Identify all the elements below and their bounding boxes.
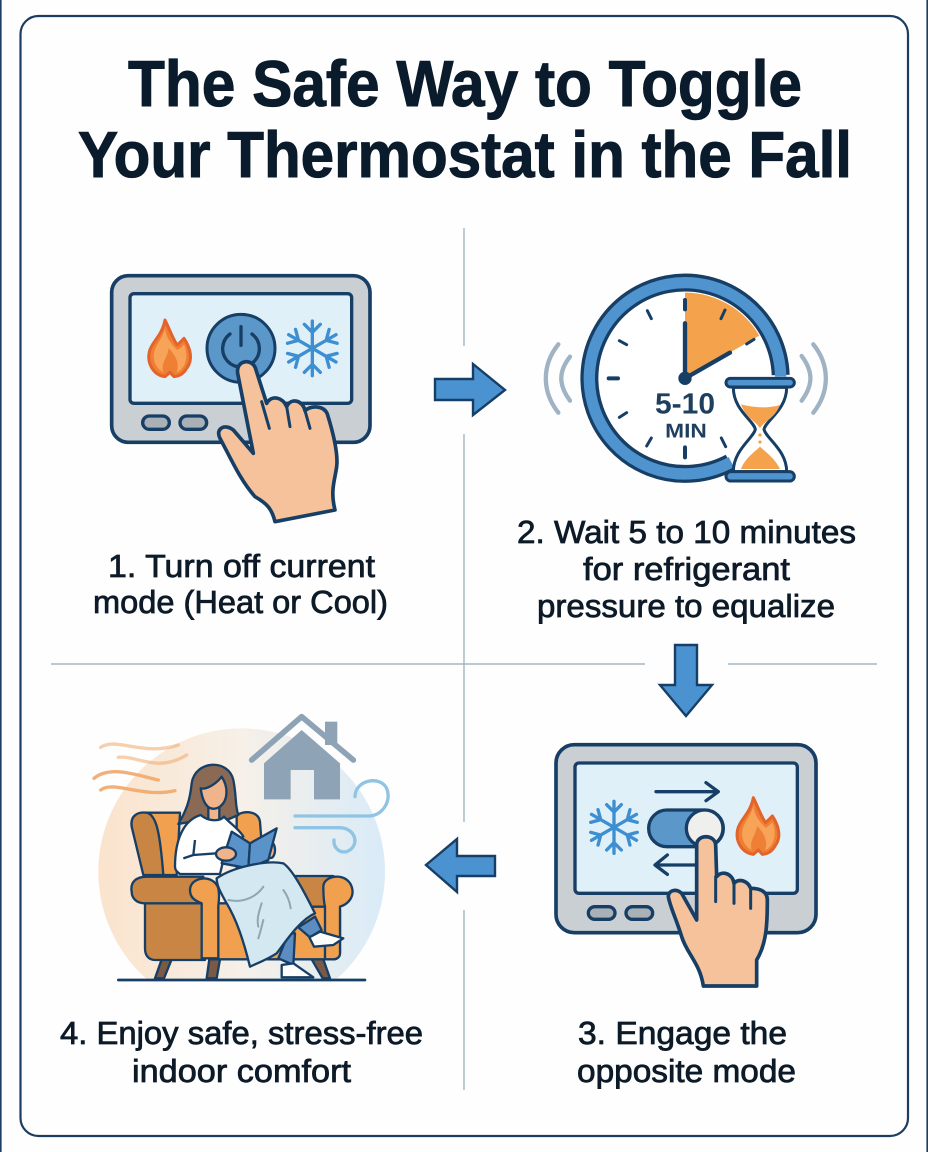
title: The Safe Way to Toggle [128, 47, 802, 120]
icon: power button [207, 314, 275, 382]
title: Your Thermostat in the Fall [78, 118, 852, 191]
person [175, 765, 343, 977]
step 3 caption: opposite mode [577, 1053, 796, 1089]
step 4 caption: 4. Enjoy safe, stress-free [60, 1015, 423, 1051]
ground line [118, 976, 365, 984]
arrow: step 2 to 3 [660, 645, 712, 716]
icon: pointing hand [668, 837, 767, 986]
step 3 caption [577, 1015, 796, 1089]
step 1 caption: 1. Turn off current [108, 548, 375, 584]
icon: pointing hand [219, 362, 337, 522]
clock ring [589, 283, 781, 474]
sound waves [546, 344, 826, 413]
background circle [98, 728, 385, 979]
clock label: 5-10 [655, 387, 715, 420]
armchair [131, 812, 353, 978]
arrow: slide right [656, 783, 718, 801]
step 1 caption: mode (Heat or Cool) [93, 584, 388, 620]
step 4 illustration: person relaxing in armchair [94, 717, 388, 1015]
step 4 caption [60, 1015, 423, 1089]
orange time sector [685, 293, 759, 378]
step 4 caption: indoor comfort [132, 1053, 351, 1089]
step 2 illustration: clock and hourglass [546, 283, 826, 481]
clock label [655, 387, 715, 442]
arrow: step 3 to 4 [426, 839, 495, 892]
step 1 illustration: thermostat and hand pressing power [112, 276, 370, 522]
step 2 caption [517, 514, 856, 624]
icon: snowflake [285, 321, 340, 376]
arrow: step 1 to 2 [435, 364, 505, 415]
blanket [217, 862, 315, 967]
step 3 illustration: thermostat with toggle [556, 745, 816, 986]
step 3 caption: 3. Engage the [578, 1015, 787, 1051]
step 2 caption: pressure to equalize [537, 588, 835, 624]
cool air lines [295, 781, 388, 852]
icon: flame [737, 798, 779, 854]
clock label: MIN [665, 420, 707, 442]
title [78, 47, 852, 191]
step 2 caption: for refrigerant [583, 551, 790, 587]
toggle switch [649, 810, 723, 847]
step 1 caption [93, 548, 388, 620]
icon: snowflake [588, 801, 640, 853]
icon: flame [149, 320, 191, 377]
clock hands [678, 323, 730, 385]
warm air waves [94, 744, 187, 793]
arrow: slide left [655, 855, 697, 874]
clock ticks [609, 300, 754, 457]
icon: house [252, 717, 353, 799]
step 2 caption: 2. Wait 5 to 10 minutes [517, 514, 856, 550]
icon: hourglass [726, 378, 794, 481]
